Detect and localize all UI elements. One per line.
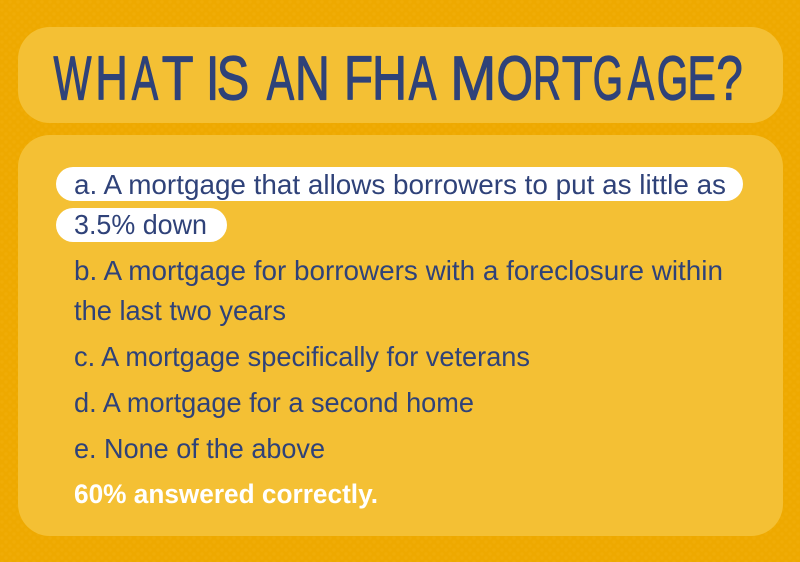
title: O: [496, 44, 533, 114]
title: R: [533, 44, 561, 114]
title: G: [657, 44, 688, 114]
option a, line 1: a. A mortgage that allows borrowers to put as little as: [74, 169, 726, 200]
title: H: [372, 44, 407, 114]
result note: 60% answered correctly.: [74, 479, 378, 509]
title: H: [95, 44, 128, 114]
option c: c. A mortgage specifically for veterans: [74, 341, 530, 372]
option a, line 2: 3.5% down: [74, 209, 207, 240]
title: A: [267, 44, 295, 114]
panel: answers: [18, 135, 783, 536]
option d: d. A mortgage for a second home: [74, 387, 474, 418]
title: E: [687, 44, 716, 114]
title: G: [593, 44, 623, 114]
title: N: [295, 44, 330, 114]
option e: e. None of the above: [74, 433, 325, 464]
title panel: [18, 27, 783, 123]
title: A: [132, 44, 159, 114]
title: A: [409, 44, 437, 114]
highlight: option a, line 1: [56, 167, 743, 201]
title: T: [562, 44, 593, 114]
title: T: [162, 44, 193, 114]
title: I: [206, 44, 219, 114]
title: A: [628, 44, 655, 114]
title: W: [54, 44, 92, 114]
highlight: option a, line 2: [56, 208, 227, 242]
title: M: [450, 44, 496, 114]
title: F: [344, 44, 373, 114]
title: S: [217, 44, 249, 114]
option b, line 2: the last two years: [74, 295, 286, 326]
title: ?: [716, 44, 743, 114]
option b, line 1: b. A mortgage for borrowers with a foreclosure within: [74, 255, 723, 286]
